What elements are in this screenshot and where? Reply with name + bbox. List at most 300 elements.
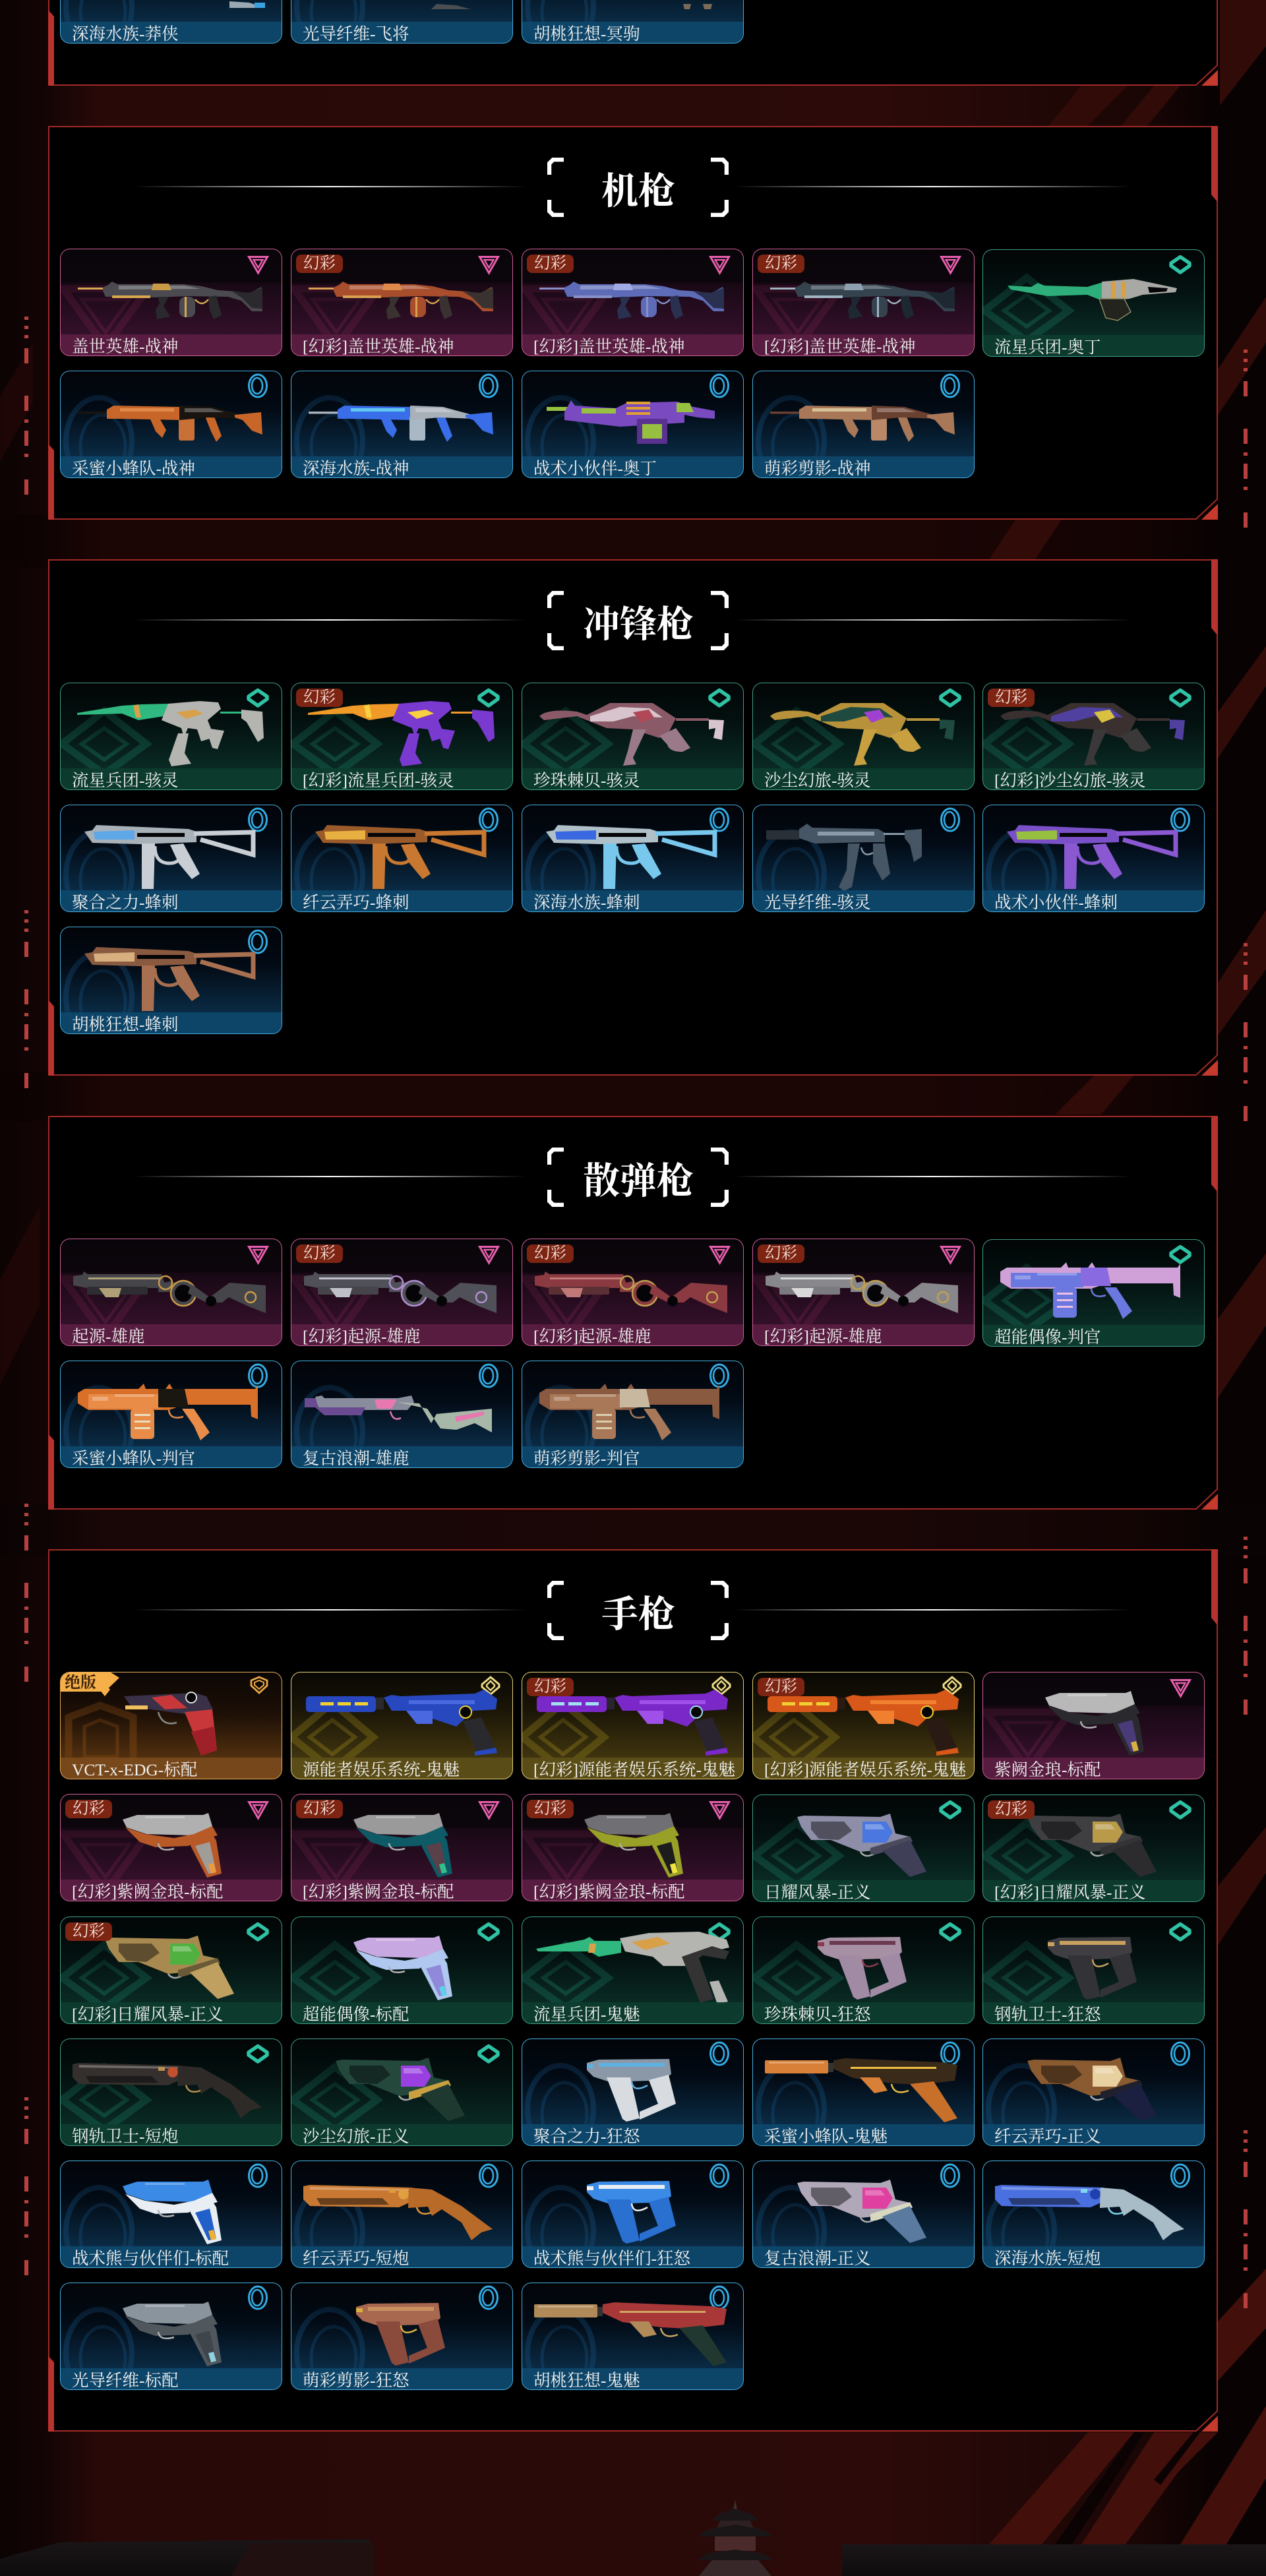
card: [幻彩]盖世英雄-战神 钢 [752, 249, 975, 356]
rarity icon [711, 2164, 729, 2187]
gun [587, 2059, 676, 2122]
label [61, 1758, 282, 1779]
gun [1027, 2058, 1157, 2121]
card: 采蜜小蜂队-判官 [60, 1361, 282, 1468]
card: 珍珠棘贝-狂怒 [752, 1917, 975, 2024]
label: [幻彩]起源-雄鹿 [533, 1327, 651, 1346]
badge [65, 1922, 112, 1941]
label: 光导纤维-骇灵 [764, 893, 870, 912]
gun [304, 1272, 497, 1313]
rarity icon [942, 257, 960, 273]
card: 深海水族-蜂刺 [522, 805, 744, 912]
gun [309, 282, 493, 319]
label: 复古浪潮-雄鹿 [303, 1449, 409, 1468]
panel: previous weapon category (cropped) [48, 0, 1218, 86]
card: [幻彩]起源-雄鹿 紫 [291, 1239, 513, 1346]
label: 紫阙金琅-标配 [994, 1760, 1101, 1779]
rarity icon [249, 2046, 267, 2062]
label: 纤云弄巧-正义 [994, 2127, 1101, 2146]
label [291, 2246, 512, 2267]
card: 流星兵团-鬼魅 [522, 1917, 744, 2024]
label: 盖世英雄-战神 [72, 337, 178, 356]
label [291, 22, 512, 43]
rarity icon [249, 1247, 268, 1263]
label [983, 1758, 1204, 1779]
gun [1000, 1262, 1180, 1319]
rarity icon [249, 257, 268, 273]
label [522, 1880, 743, 1901]
heading: 冲锋枪: 冲锋枪 [583, 605, 694, 646]
label [61, 1880, 282, 1901]
card: 战术熊与伙伴们-标配 [60, 2161, 282, 2268]
gun [547, 400, 715, 444]
label: 战术小伙伴-奥丁 [533, 459, 657, 478]
rarity icon [713, 1677, 730, 1694]
label [522, 2246, 743, 2267]
label [61, 2368, 282, 2389]
rarity icon [710, 690, 729, 706]
card: 复古浪潮-雄鹿 [291, 1361, 513, 1468]
badge: 幻彩 [534, 255, 566, 272]
card: [幻彩]沙尘幻旅-骇灵 [982, 683, 1205, 790]
gun [84, 947, 253, 1011]
gun [308, 701, 495, 766]
label: [幻彩]起源-雄鹿 [303, 1327, 420, 1346]
card: [幻彩]起源-雄鹿 灰 [752, 1239, 975, 1346]
badge: 幻彩 [765, 255, 797, 272]
gun [336, 2058, 465, 2121]
panel: 冲锋枪 [48, 559, 1218, 1076]
gun [78, 406, 262, 442]
rarity icon [711, 1247, 729, 1263]
label: 珍珠棘贝-狂怒 [764, 2005, 870, 2024]
label [983, 2246, 1204, 2267]
heading: 手枪: 手枪 [601, 1595, 675, 1636]
label [291, 2124, 512, 2145]
label: 胡桃狂想-冥驹 [533, 24, 640, 44]
limited badge [59, 1671, 119, 1696]
gun [1000, 703, 1185, 766]
gun [105, 1936, 234, 1999]
label: 日耀风暴-正义 [764, 1883, 870, 1902]
label: 萌彩剪影-狂怒 [303, 2371, 409, 2390]
label [753, 768, 974, 789]
gun [584, 1813, 683, 1878]
card: [幻彩]紫阙金琅-标配 青 [291, 1794, 513, 1901]
panel: 散弹枪 [48, 1116, 1218, 1510]
label: 光导纤维-飞将 [303, 24, 409, 44]
rarity icon [942, 1247, 960, 1263]
card: 纤云弄巧-正义 [982, 2039, 1205, 2146]
card: 深海水族-莽侠 [60, 0, 282, 44]
card: 流星兵团-骇灵 [60, 683, 282, 790]
label: [幻彩]紫阙金琅-标配 [72, 1882, 223, 1901]
card: 萌彩剪影-战神 [752, 371, 975, 478]
rarity icon [249, 1924, 267, 1940]
gun [768, 1690, 959, 1756]
label [753, 1880, 974, 1901]
label: 深海水族-战神 [303, 459, 409, 478]
rarity icon [251, 1677, 267, 1693]
card: 胡桃狂想-蜂刺 [60, 927, 282, 1034]
label [983, 1880, 1204, 1901]
badge [527, 1244, 574, 1263]
gun [797, 2180, 926, 2243]
rarity icon [1171, 1924, 1190, 1940]
label: [幻彩]盖世英雄-战神 [533, 337, 684, 356]
label: 深海水族-蜂刺 [533, 893, 640, 912]
card: 深海水族-短炮 [982, 2161, 1205, 2268]
rarity icon [249, 2164, 267, 2187]
badge: 幻彩 [534, 1244, 566, 1262]
badge [296, 689, 343, 707]
badge [296, 255, 343, 273]
label [753, 334, 974, 355]
label: 流星兵团-鬼魅 [533, 2005, 640, 2024]
label [61, 768, 282, 789]
label: 流星兵团-骇灵 [72, 771, 178, 790]
label [291, 768, 512, 789]
label [61, 2002, 282, 2023]
rarity icon [480, 809, 498, 831]
label: 萌彩剪影-判官 [533, 1449, 640, 1468]
label: 战术小伙伴-蜂刺 [994, 893, 1118, 912]
badge: 幻彩 [303, 1800, 336, 1818]
gun [303, 2185, 493, 2240]
rarity icon [480, 2286, 498, 2309]
card: 纤云弄巧-蜂刺 [291, 805, 513, 912]
rarity icon [480, 2164, 498, 2187]
heading: 机枪 [140, 158, 1125, 217]
badge: 幻彩 [303, 255, 336, 272]
card: 纤云弄巧-短炮 [291, 2161, 513, 2268]
label: 战术熊与伙伴们-标配 [72, 2249, 229, 2268]
label: 超能偶像-判官 [994, 1328, 1101, 1347]
badge [988, 1800, 1035, 1819]
card: 紫阙金琅-标配 [982, 1672, 1205, 1779]
rarity icon [480, 257, 498, 273]
label: 复古浪潮-正义 [764, 2249, 870, 2268]
label [753, 456, 974, 477]
label: 萌彩剪影-战神 [764, 459, 870, 478]
badge [527, 1800, 574, 1818]
card: 钢轨卫士-短炮 [60, 2039, 282, 2146]
badge [988, 689, 1035, 707]
label [522, 334, 743, 355]
gun [1045, 1691, 1144, 1756]
label [983, 890, 1204, 911]
card: 沙尘幻旅-正义 [291, 2039, 513, 2146]
label [291, 2368, 512, 2389]
gun [546, 825, 715, 889]
card: 聚合之力-蜂刺 [60, 805, 282, 912]
label: 源能者娱乐系统-鬼魅 [303, 1760, 460, 1779]
label: 珍珠棘贝-骇灵 [533, 771, 640, 790]
gun [315, 825, 484, 889]
gun [123, 2302, 222, 2366]
label [753, 2246, 974, 2267]
label: [幻彩]日耀风暴-正义 [994, 1883, 1145, 1902]
heading: 冲锋枪 [140, 591, 1125, 650]
gun [535, 1272, 727, 1313]
label: [幻彩]起源-雄鹿 [764, 1327, 882, 1346]
rarity icon [711, 257, 729, 273]
rarity icon [480, 1247, 498, 1263]
card: 盖世英雄-战神 [60, 249, 282, 356]
badge: 幻彩 [995, 1800, 1027, 1818]
label: 起源-雄鹿 [72, 1327, 145, 1346]
card: [幻彩]紫阙金琅-标配 橙 [60, 1794, 282, 1901]
rarity icon [942, 809, 959, 831]
rarity icon [941, 690, 959, 706]
rarity icon [249, 2286, 267, 2309]
gun [78, 1384, 258, 1440]
gun [765, 2058, 957, 2122]
panel: 手枪 [48, 1549, 1218, 2432]
rarity icon [711, 1802, 729, 1818]
label [291, 456, 512, 477]
label [522, 2124, 743, 2145]
label: 采蜜小蜂队-鬼魅 [764, 2127, 888, 2146]
gun [797, 1814, 926, 1877]
card: [幻彩]盖世英雄-战神 蓝 [522, 249, 744, 356]
rarity icon [249, 809, 267, 831]
label: 聚合之力-蜂刺 [72, 893, 178, 912]
card: [幻彩]日耀风暴-正义 暗 [982, 1794, 1205, 1902]
card: 钢轨卫士-狂怒 [982, 1917, 1205, 2024]
label: 胡桃狂想-蜂刺 [72, 1015, 178, 1034]
gun [537, 1690, 728, 1756]
gun [353, 1936, 452, 2000]
gun [766, 824, 922, 891]
card: [幻彩]起源-雄鹿 红 [522, 1239, 744, 1346]
rarity icon [249, 375, 267, 397]
label [291, 1324, 512, 1345]
rarity icon [480, 1802, 498, 1818]
label [522, 1324, 743, 1345]
rarity icon [710, 1924, 729, 1940]
gun [73, 2063, 262, 2118]
card: 流星兵团-奥丁 [982, 249, 1205, 357]
gun [78, 282, 262, 319]
rarity icon [941, 1802, 959, 1818]
rarity icon [942, 2164, 959, 2187]
label [983, 2002, 1204, 2023]
label [61, 456, 282, 477]
label [61, 334, 282, 355]
card: [幻彩]紫阙金琅-标配 黄 [522, 1794, 744, 1901]
gun [84, 825, 253, 889]
rarity icon [482, 1677, 499, 1694]
card: [幻彩]流星兵团-骇灵 [291, 683, 513, 790]
card: [幻彩]盖世英雄-战神 橙 [291, 249, 513, 356]
label [61, 1446, 282, 1467]
heading: 机枪: 机枪 [601, 171, 675, 212]
rarity icon [711, 809, 729, 831]
rarity icon [1171, 1802, 1190, 1818]
label: [幻彩]紫阙金琅-标配 [533, 1882, 684, 1901]
panel: 机枪 [48, 126, 1218, 520]
label: 超能偶像-标配 [303, 2005, 409, 2024]
rarity icon [480, 375, 498, 397]
badge [527, 255, 574, 273]
limited badge: 绝版 [65, 1674, 96, 1692]
label [522, 2002, 743, 2023]
gun [995, 2185, 1184, 2240]
card: 源能者娱乐系统-鬼魅 [291, 1672, 513, 1779]
badge [758, 1244, 804, 1263]
rarity icon [479, 690, 498, 706]
heading: 散弹枪 [140, 1148, 1125, 1207]
gun [123, 1813, 222, 1878]
label [522, 768, 743, 789]
label [753, 2124, 974, 2145]
badge: 幻彩 [534, 1800, 566, 1818]
badge: 幻彩 [73, 1800, 105, 1818]
label: 纤云弄巧-短炮 [303, 2249, 409, 2268]
rarity icon [249, 931, 267, 953]
label [753, 1324, 974, 1345]
gun [539, 1384, 719, 1440]
label [291, 1880, 512, 1901]
card: [幻彩]源能者娱乐系统-鬼魅 紫 [522, 1672, 744, 1779]
label: 聚合之力-狂怒 [533, 2127, 640, 2146]
label: 流星兵团-奥丁 [994, 338, 1101, 357]
badge [296, 1244, 343, 1263]
card: [幻彩]源能者娱乐系统-鬼魅 橙 [752, 1672, 975, 1779]
gun [124, 1692, 217, 1756]
badge: 幻彩 [73, 1922, 105, 1940]
badge [758, 255, 804, 273]
label: 沙尘幻旅-骇灵 [764, 771, 870, 790]
label: 光导纤维-标配 [72, 2371, 178, 2390]
gun [1007, 825, 1176, 889]
label [522, 890, 743, 911]
gun [123, 2180, 222, 2244]
card: 沙尘幻旅-骇灵 [752, 683, 975, 790]
label: 纤云弄巧-蜂刺 [303, 893, 409, 912]
label [983, 2124, 1204, 2145]
rarity icon [249, 1802, 268, 1818]
gun [770, 406, 955, 442]
gun [539, 282, 724, 319]
badge [758, 1678, 804, 1696]
gun [818, 1937, 907, 2000]
gun [766, 1272, 958, 1313]
card: 萌彩剪影-狂怒 [291, 2283, 513, 2390]
gun [305, 1395, 492, 1432]
rarity icon [711, 2286, 729, 2309]
label [522, 456, 743, 477]
gun [770, 703, 955, 766]
rarity icon [479, 2046, 498, 2062]
rarity icon [1171, 690, 1190, 706]
label: VCT-x-EDG-标配 [72, 1760, 197, 1779]
gun [353, 1813, 452, 1878]
gun [306, 1690, 497, 1756]
rarity icon [1172, 2042, 1190, 2065]
label: [幻彩]紫阙金琅-标配 [303, 1882, 454, 1901]
label [291, 1758, 512, 1779]
badge: 幻彩 [765, 1244, 797, 1262]
heading: 散弹枪: 散弹枪 [583, 1161, 694, 1202]
label [522, 2368, 743, 2389]
card: 战术熊与伙伴们-狂怒 [522, 2161, 744, 2268]
label [522, 22, 743, 43]
card: VCT-x-EDG-标配 [60, 1672, 282, 1779]
label [753, 890, 974, 911]
label: 深海水族-短炮 [994, 2249, 1101, 2268]
card: 胡桃狂想-冥驹 [522, 0, 744, 44]
card: 采蜜小蜂队-鬼魅 [752, 2039, 975, 2146]
badge: 幻彩 [765, 1678, 797, 1696]
gun [77, 701, 264, 766]
badge: 幻彩 [303, 689, 336, 706]
badge [65, 1800, 112, 1818]
label: [幻彩]盖世英雄-战神 [764, 337, 915, 356]
rarity icon [1172, 809, 1190, 831]
card: 日耀风暴-正义 [752, 1794, 975, 1902]
rarity icon [711, 2042, 729, 2065]
card: 超能偶像-标配 [291, 1917, 513, 2024]
label: [幻彩]盖世英雄-战神 [303, 337, 454, 356]
rarity icon [249, 690, 267, 706]
label: 胡桃狂想-鬼魅 [533, 2371, 640, 2390]
gun [536, 1932, 729, 2004]
label [61, 22, 282, 43]
rarity icon [249, 1365, 267, 1387]
card: 胡桃狂想-鬼魅 [522, 2283, 744, 2390]
card: 萌彩剪影-判官 [522, 1361, 744, 1468]
label: [幻彩]源能者娱乐系统-鬼魅 [533, 1760, 735, 1779]
rarity icon [480, 1365, 498, 1387]
rarity icon [1172, 2164, 1190, 2187]
label [753, 2002, 974, 2023]
card: 战术小伙伴-蜂刺 [982, 805, 1205, 912]
gun [770, 282, 955, 319]
rarity icon [479, 1924, 498, 1940]
card: 超能偶像-判官 [982, 1239, 1205, 1347]
rarity icon [944, 1677, 961, 1694]
label: 深海水族-莽侠 [72, 24, 178, 44]
rarity icon [1171, 1247, 1190, 1262]
label: 战术熊与伙伴们-狂怒 [533, 2249, 690, 2268]
label: 钢轨卫士-狂怒 [994, 2005, 1101, 2024]
card: 复古浪潮-正义 [752, 2161, 975, 2268]
badge: 幻彩 [534, 1678, 566, 1696]
card: [幻彩]日耀风暴-正义 金 [60, 1917, 282, 2024]
gun [1008, 279, 1177, 321]
label: 钢轨卫士-短炮 [72, 2127, 178, 2146]
label [291, 1446, 512, 1467]
label [291, 334, 512, 355]
label: 采蜜小蜂队-判官 [72, 1449, 195, 1468]
label [983, 335, 1204, 356]
card: 采蜜小蜂队-战神 [60, 371, 282, 478]
label [61, 890, 282, 911]
card: 战术小伙伴-奥丁 [522, 371, 744, 478]
rarity icon [711, 1365, 729, 1387]
card: 深海水族-战神 [291, 371, 513, 478]
badge [527, 1678, 574, 1696]
card: 光导纤维-标配 [60, 2283, 282, 2390]
label [983, 1325, 1204, 1346]
card: 起源-雄鹿 [60, 1239, 282, 1346]
card: 光导纤维-骇灵 [752, 805, 975, 912]
label: [幻彩]沙尘幻旅-骇灵 [994, 771, 1145, 790]
card: 光导纤维-飞将 [291, 0, 513, 44]
card: 聚合之力-狂怒 [522, 2039, 744, 2146]
